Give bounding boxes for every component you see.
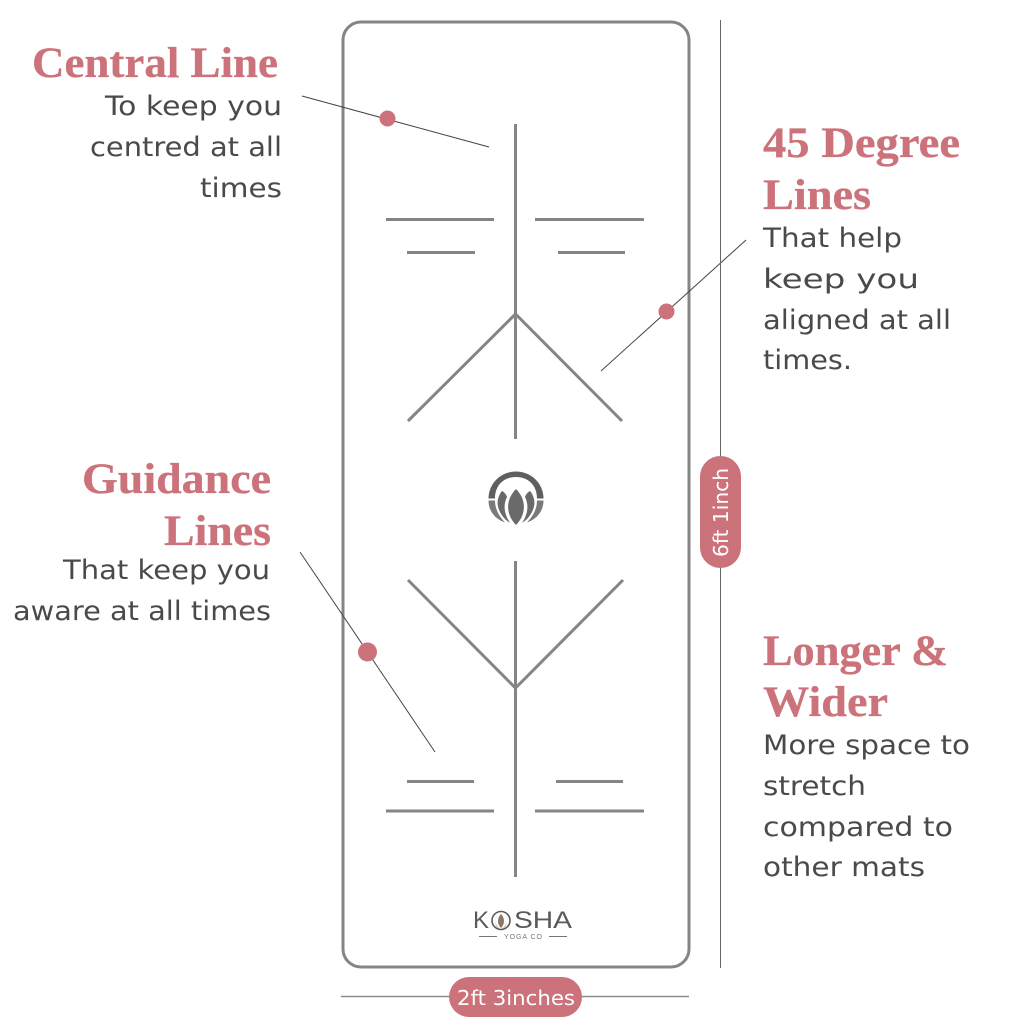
dimension line <box>341 996 689 998</box>
heading: Lines <box>763 172 871 219</box>
icon: lotus emblem <box>488 472 544 525</box>
marker dot <box>658 304 674 320</box>
description: That keep you <box>62 555 270 586</box>
description: To keep you <box>104 91 282 122</box>
heading <box>763 628 948 726</box>
lower alignment lines <box>386 561 644 877</box>
heading: Wider <box>763 679 888 726</box>
heading: Lines <box>164 508 271 555</box>
callout: guidance lines <box>13 456 435 752</box>
mat outline <box>343 22 689 967</box>
logo: KOSHA Yoga Co: YOGA CO <box>504 934 543 941</box>
description <box>762 223 951 376</box>
description: centred at all <box>90 132 282 163</box>
description: stretch <box>763 771 866 802</box>
description: other mats <box>763 852 925 883</box>
description: keep you <box>763 264 919 295</box>
length label: 6ft 1inch <box>709 468 733 557</box>
width dimension <box>341 977 689 1017</box>
width pill <box>449 977 582 1017</box>
marker dot <box>380 110 396 126</box>
logo: KOSHA Yoga Co: K <box>473 907 489 934</box>
heading <box>763 120 960 219</box>
length pill <box>700 456 741 568</box>
marker dot <box>358 642 377 662</box>
dimension line <box>720 20 722 968</box>
description: aware at all times <box>13 596 271 627</box>
description: That help <box>762 223 902 254</box>
logo: KOSHA Yoga Co <box>473 907 572 941</box>
description <box>763 730 970 883</box>
heading: Longer & <box>763 628 948 675</box>
yoga mat <box>343 22 689 967</box>
length dimension <box>700 20 741 968</box>
description: More space to <box>763 730 970 761</box>
description: compared to <box>763 812 953 843</box>
description: times <box>200 173 282 204</box>
heading: Central Line <box>32 40 278 87</box>
leader line <box>601 240 746 371</box>
description <box>90 91 282 204</box>
description <box>13 555 271 627</box>
leader line <box>302 96 489 147</box>
heading <box>82 456 271 555</box>
leader line <box>300 552 435 752</box>
heading: 45 Degree <box>763 120 960 167</box>
callout: longer and wider <box>763 628 970 883</box>
width label: 2ft 3inches <box>457 986 575 1010</box>
upper alignment lines <box>386 124 644 439</box>
description: times. <box>763 345 852 376</box>
description: aligned at all <box>763 305 951 336</box>
heading: Guidance <box>82 456 271 503</box>
callout: 45 degree lines <box>601 120 960 376</box>
callout: central line <box>32 40 489 204</box>
logo: KOSHA Yoga Co: SHA <box>514 907 572 934</box>
